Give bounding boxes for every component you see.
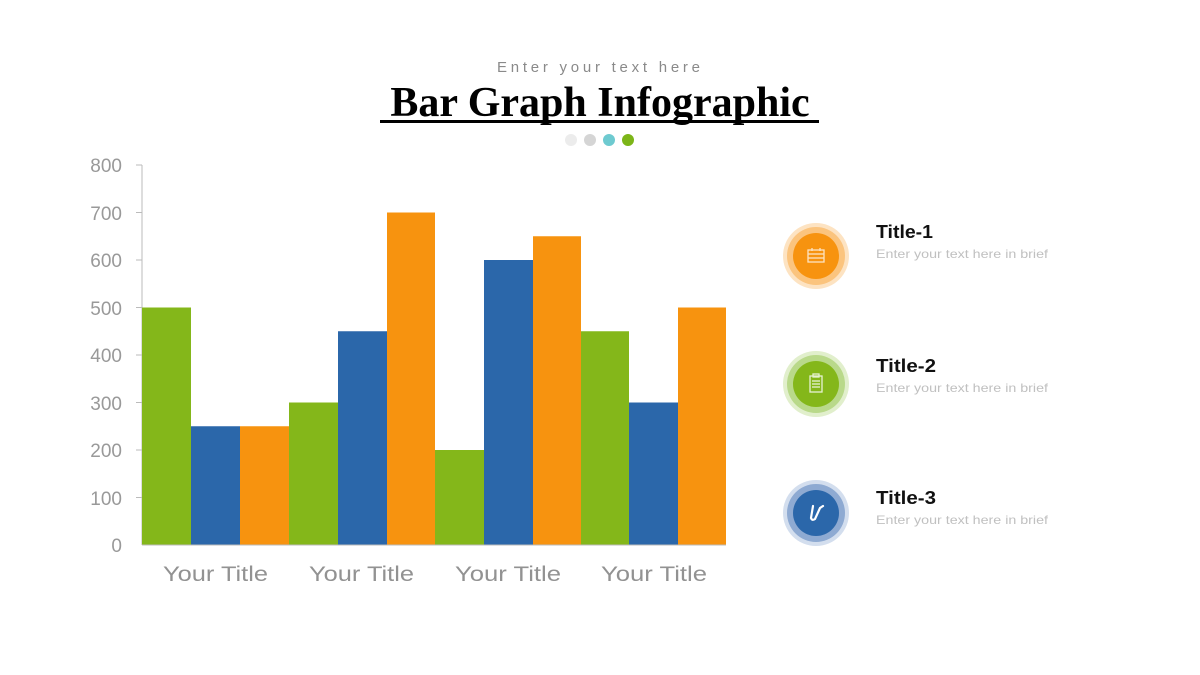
x labels (163, 563, 707, 586)
y axis labels: 700 (90, 204, 122, 225)
x labels: Your Title (455, 563, 561, 586)
bar chart (90, 156, 726, 586)
item 1: orange calendar (783, 222, 1049, 289)
y axis labels: 400 (90, 346, 122, 367)
x labels: Your Title (309, 563, 414, 586)
y axis labels: 800 (90, 156, 122, 177)
decorative dots (565, 134, 634, 146)
y axis labels: 200 (90, 441, 122, 462)
y axis labels (90, 156, 122, 557)
item 3: blue saxophone: Title-3 (876, 488, 936, 508)
icon: clipboard (810, 374, 822, 392)
item 1: orange calendar: Title-1 (876, 222, 933, 242)
x labels: Your Title (163, 563, 268, 586)
item 2: green clipboard: Enter your text here in brief (876, 381, 1049, 395)
item 2: green clipboard (783, 351, 1049, 417)
icon: saxophone (811, 506, 823, 520)
y axis labels: 300 (90, 394, 122, 415)
y axis labels: 0 (111, 536, 122, 557)
icon: calendar (808, 248, 824, 262)
item 3: blue saxophone: Enter your text here in brief (876, 513, 1049, 527)
title: Bar Graph Infographic (390, 80, 810, 126)
item 2: green clipboard: Title-2 (876, 356, 936, 376)
y axis labels: 600 (90, 251, 122, 272)
item 3: blue saxophone (783, 480, 1049, 546)
x labels: Your Title (601, 563, 707, 586)
bars (142, 308, 191, 545)
y axis labels: 500 (90, 299, 122, 320)
subtitle: Enter your text here (497, 59, 700, 76)
y axis labels: 100 (90, 489, 122, 510)
item 1: orange calendar: Enter your text here in brief (876, 247, 1049, 261)
